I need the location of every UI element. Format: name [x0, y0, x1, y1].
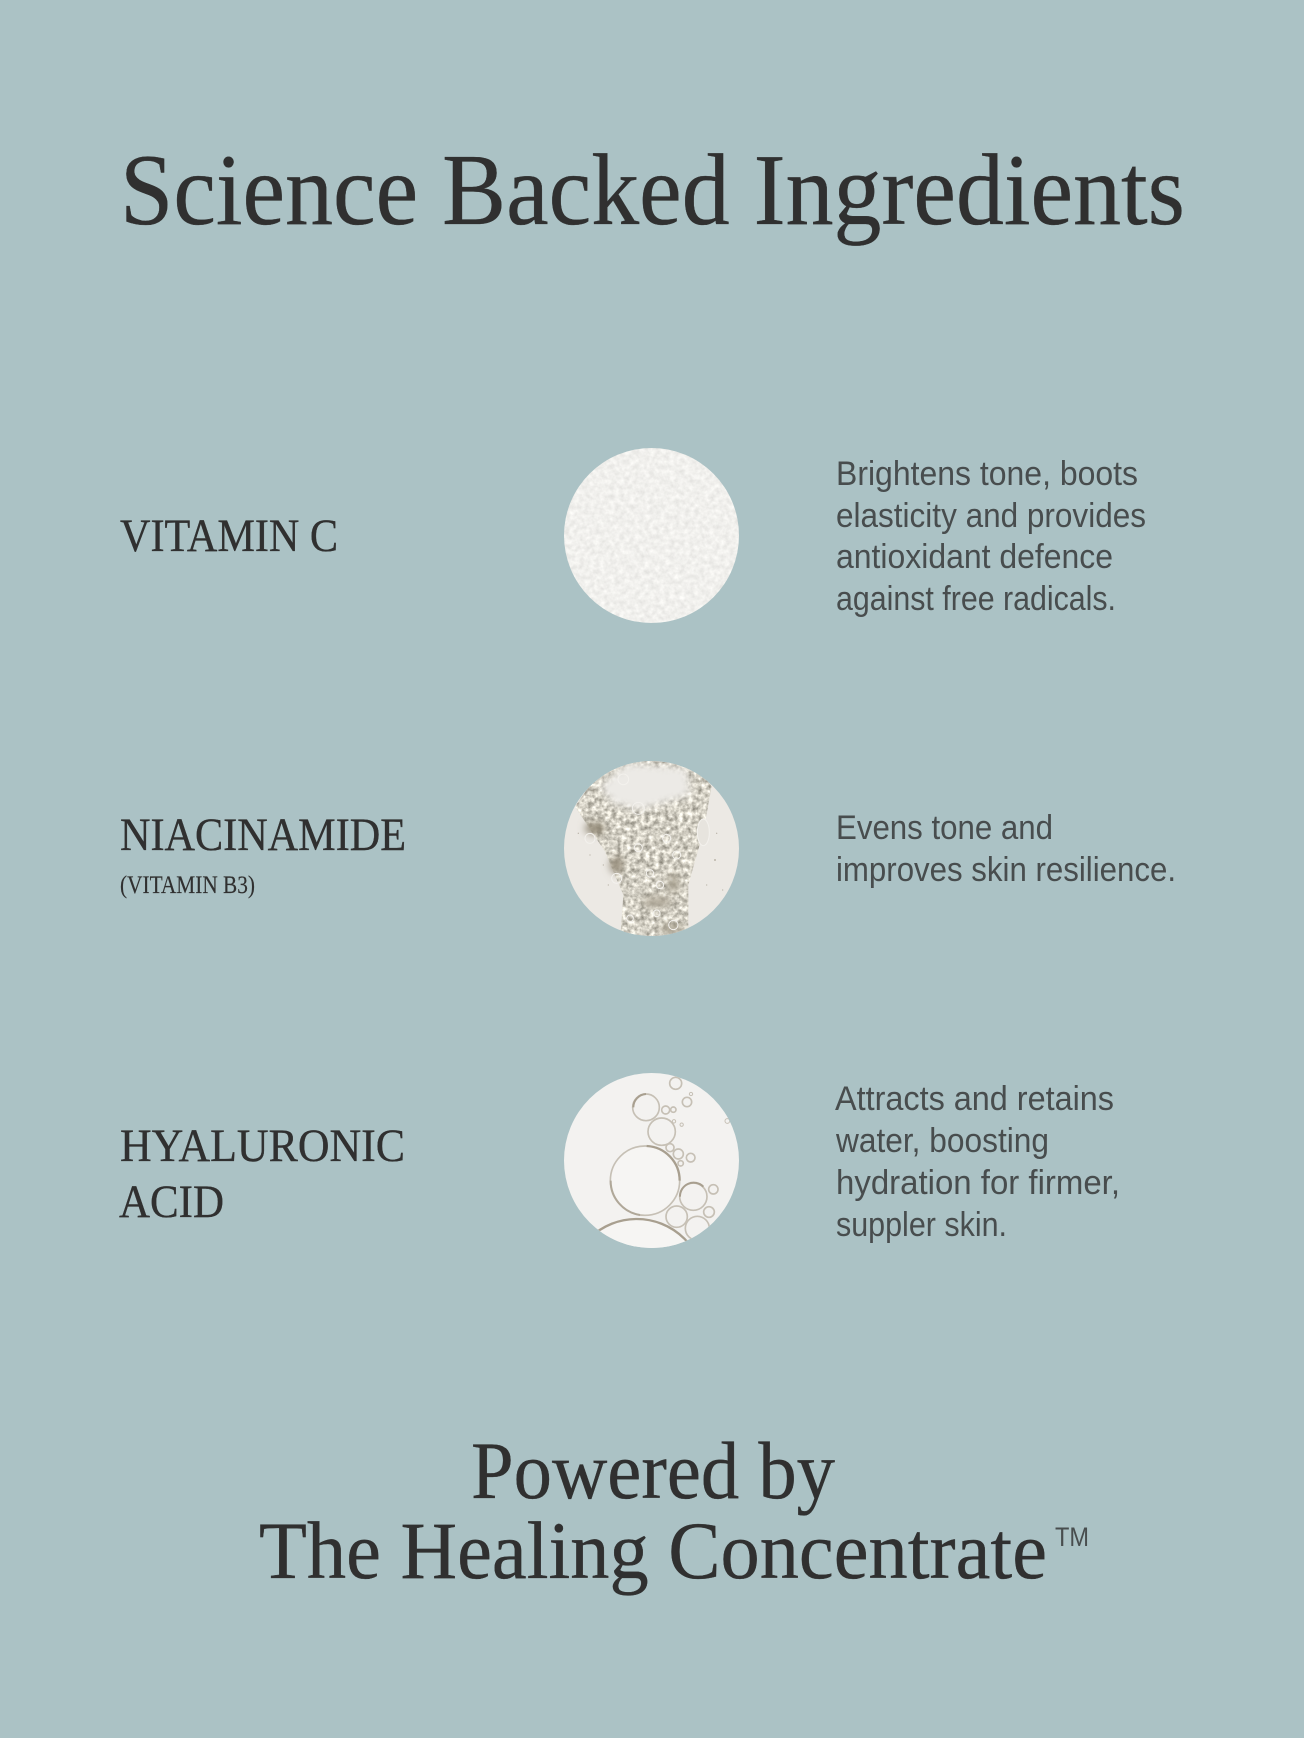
- description: niacinamide: [836, 809, 1176, 889]
- image: bubbles circle: [564, 1073, 739, 1248]
- description: vitamin C: against free radicals.: [836, 580, 1116, 618]
- footer heading: The Healing Concentrate: [259, 1505, 1047, 1596]
- description: vitamin C: [836, 455, 1146, 618]
- description: hyaluronic acid: suppler skin.: [836, 1206, 1007, 1244]
- image: white powder circle: [564, 448, 740, 624]
- description: niacinamide: improves skin resilience.: [836, 851, 1176, 889]
- label: niacinamide: (VITAMIN B3): [120, 872, 255, 899]
- footer heading: [259, 1425, 1089, 1596]
- title: Science Backed Ingredients: [120, 134, 1185, 247]
- description: hyaluronic acid: [835, 1080, 1120, 1244]
- footer heading: TM: [1055, 1522, 1089, 1552]
- description: hyaluronic acid: water, boosting: [835, 1122, 1049, 1160]
- description: hyaluronic acid: hydration for firmer,: [836, 1164, 1120, 1202]
- label: hyaluronic acid: [119, 1120, 405, 1228]
- description: vitamin C: antioxidant defence: [836, 538, 1113, 576]
- image: water splash circle: [564, 758, 740, 942]
- row: hyaluronic acid: [119, 1073, 1118, 1248]
- label: vitamin C: VITAMIN C: [120, 510, 338, 562]
- footer heading: Powered by: [471, 1425, 835, 1516]
- label: hyaluronic acid: ACID: [119, 1176, 224, 1228]
- label: niacinamide: [120, 809, 406, 899]
- description: vitamin C: elasticity and provides: [836, 497, 1146, 535]
- description: vitamin C: Brightens tone, boots: [836, 455, 1138, 493]
- description: niacinamide: Evens tone and: [836, 809, 1053, 847]
- label: hyaluronic acid: HYALURONIC: [120, 1120, 405, 1172]
- row: niacinamide: [120, 758, 1176, 942]
- description: hyaluronic acid: Attracts and retains: [835, 1080, 1114, 1118]
- label: niacinamide: NIACINAMIDE: [120, 809, 406, 861]
- row: vitamin C: [120, 448, 1146, 624]
